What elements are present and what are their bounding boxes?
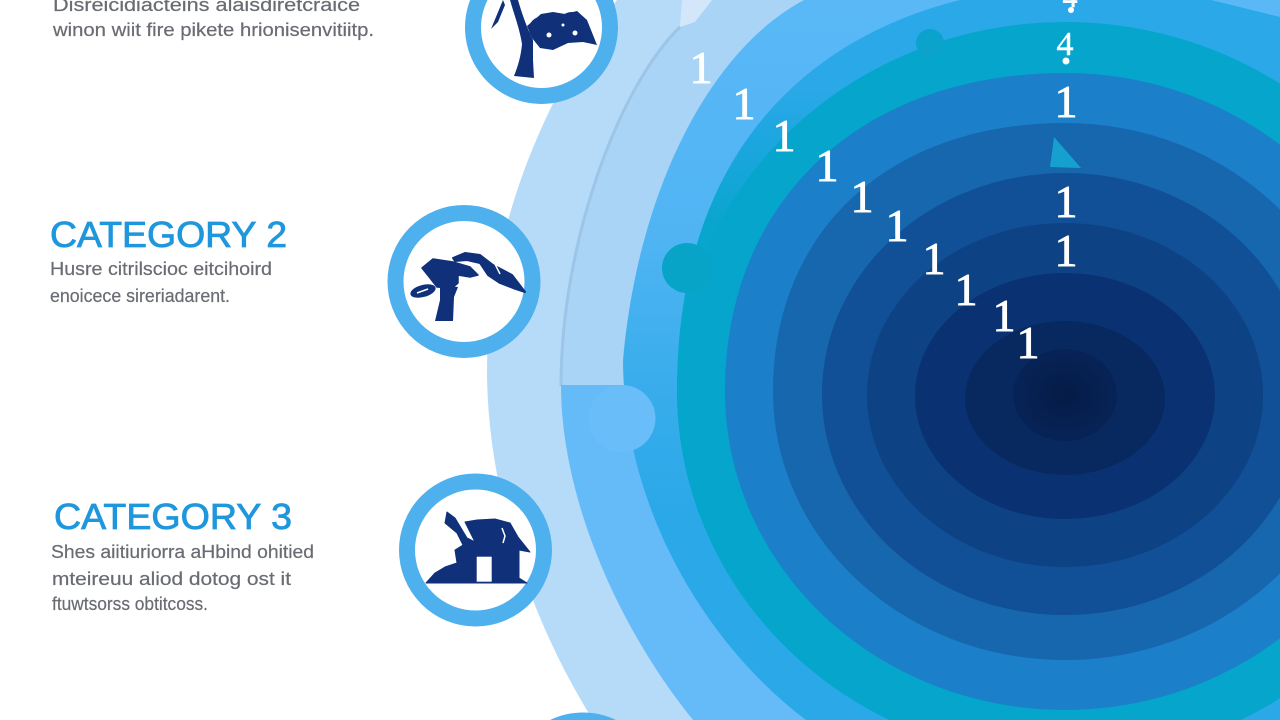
ring numbers vertical: 4	[1056, 26, 1074, 63]
ring 3	[773, 123, 1280, 660]
ring numbers diagonal: 1	[690, 42, 712, 93]
ring numbers diagonal: 1	[850, 171, 874, 222]
ring numbers diagonal: 1	[1016, 317, 1040, 368]
category 3 text block: mteireuu aliod dotog ost it	[52, 569, 291, 589]
mid blue band	[623, 0, 1280, 720]
bubble on tab	[588, 385, 656, 452]
ring numbers vertical: 1	[1054, 176, 1078, 227]
sky to teal band	[677, 0, 1280, 720]
ring 7	[965, 321, 1165, 475]
upper pale band	[561, 0, 804, 386]
highlight sliver	[680, 0, 712, 27]
storm eye	[1013, 349, 1117, 441]
heading: category 2: CATEGORY 2	[50, 214, 287, 255]
teal ring	[677, 22, 1280, 720]
lower sky band with tab	[561, 385, 1280, 720]
thin curved line	[561, 27, 680, 386]
ring numbers diagonal: 1	[816, 140, 838, 191]
icon: bending tree	[465, 0, 618, 104]
icon: uprooted tree	[396, 213, 532, 350]
ring numbers diagonal: 1	[922, 233, 946, 284]
category 3 text block: ftuwtsorss obtitcoss.	[52, 594, 208, 614]
ring 6	[915, 273, 1215, 519]
icon: category 4 ring, cropped	[550, 713, 616, 720]
ring numbers diagonal: 1	[772, 110, 796, 161]
ring numbers diagonal: 1	[954, 264, 978, 315]
blue ring	[725, 73, 1280, 710]
category 1 text block: winon wiit fire pikete hrionisenvitiitp.	[52, 20, 374, 40]
ring numbers vertical	[1054, 0, 1078, 276]
ring numbers vertical: 1	[1054, 225, 1078, 276]
ring numbers diagonal: 1	[732, 78, 756, 129]
category 2 text block: Husre citrilscioc eitcihoird	[50, 259, 272, 279]
concentric storm rings chart	[487, 0, 1280, 720]
icon: damaged house	[407, 482, 544, 618]
teal triangle marker	[1050, 137, 1081, 168]
outer pale ring	[487, 0, 1280, 720]
teal bump upper	[916, 29, 944, 57]
category 1 text block	[52, 0, 374, 40]
ring numbers diagonal: 1	[992, 290, 1016, 341]
ring numbers diagonal	[690, 42, 1040, 368]
category 2 text block	[50, 214, 287, 306]
ring numbers vertical: 1	[1054, 76, 1078, 127]
heading: category 3: CATEGORY 3	[54, 496, 292, 537]
ring numbers diagonal: 1	[886, 200, 908, 251]
category 2 text block: enoicece sireriadarent.	[50, 286, 230, 306]
ring 5	[867, 223, 1263, 567]
category 3 text block	[51, 496, 314, 614]
category 3 text block: Shes aiitiuriorra aHbind ohitied	[51, 542, 314, 562]
teal bump left	[662, 243, 712, 293]
ring 4	[822, 173, 1280, 615]
